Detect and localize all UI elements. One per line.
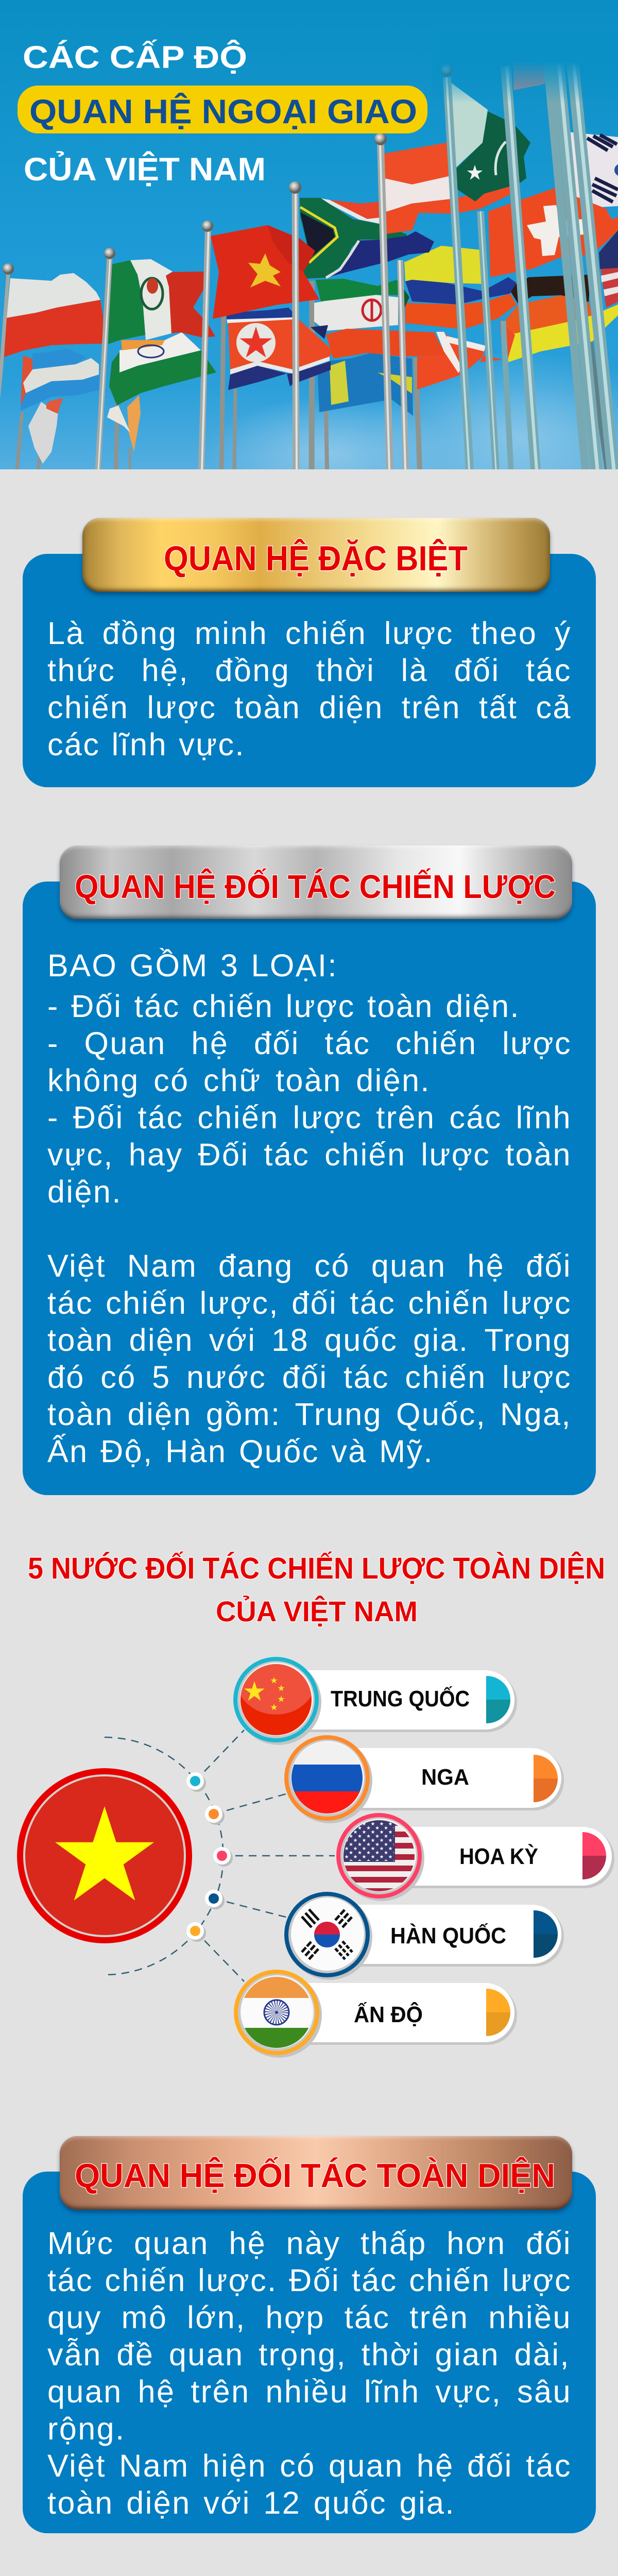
text block: toan dien description: hợp (265, 2300, 325, 2335)
text block: toan dien description: hiện (202, 2448, 267, 2483)
text block: chien luoc description: lược (293, 1100, 362, 1135)
text: bao gom 3 loai: LOẠI: (251, 948, 338, 983)
text block: toan dien description: đối (467, 2448, 513, 2483)
text block: toan dien description: gian (435, 2337, 500, 2372)
text block: chien luoc description: đối (291, 1285, 337, 1320)
text block: chien luoc description: Trung (295, 1397, 382, 1432)
pole tops (3, 64, 453, 275)
text block: toan dien description: hệ (138, 2374, 175, 2409)
text block: chien luoc description: toàn (47, 1397, 114, 1432)
text block: chien luoc description: chiến (408, 1285, 490, 1320)
text block: dac biet description: đối (454, 653, 500, 688)
back flag poles (17, 281, 608, 469)
title pill: QUAN HỆ NGOẠI GIAO (29, 92, 417, 130)
text block: dac biet description: đồng (102, 616, 177, 651)
panel: doi tac chien luoc (23, 882, 596, 1495)
text block: toan dien description: hơn (447, 2226, 506, 2261)
text block: dac biet description: thức (47, 653, 115, 688)
text block: toan dien description: hệ (229, 2226, 266, 2261)
text block: toan dien description: nhiều (265, 2374, 349, 2409)
row: nga (284, 1735, 564, 1823)
text block: chien luoc description: nước (186, 1360, 266, 1395)
text block: toan dien description: trọng, (259, 2337, 347, 2372)
sky background (0, 0, 618, 469)
text block: chien luoc description: lược, (200, 1285, 279, 1320)
flag: sweden (318, 353, 413, 416)
text block: chien luoc description: lược (502, 1026, 572, 1061)
front flag poles (0, 63, 614, 469)
text block: chien luoc description: Độ, (100, 1434, 153, 1469)
text block: chien luoc description: hệ (467, 1248, 505, 1283)
flag: south africa (300, 198, 434, 279)
text block: chien luoc description: chiến (405, 1360, 487, 1395)
text block: chien luoc description: vực, (47, 1137, 114, 1172)
text block: chien luoc description: Đối (71, 989, 122, 1024)
text block: toan dien description: sâu (517, 2374, 572, 2409)
text block: toan dien description: tác (352, 2263, 398, 2298)
row: an do (234, 1970, 517, 2058)
text block: chien luoc description: và (331, 1434, 367, 1469)
text block: chien luoc description: chiến (396, 1026, 477, 1061)
text block: chien luoc description: Việt (47, 1248, 106, 1283)
text: bao gom 3 loai: BAO (47, 948, 117, 983)
text block: toan dien description: quan (47, 2374, 123, 2409)
text block: toan dien description: chiến (409, 2263, 491, 2298)
text block: toan dien description: Mức (47, 2226, 114, 2261)
text block: chien luoc description: quan (371, 1248, 447, 1283)
top sky fade (433, 31, 618, 103)
flag: mexico (108, 259, 215, 344)
row: hoa ky (336, 1813, 614, 1901)
text block: chien luoc description: diện (128, 1397, 192, 1432)
text block: chien luoc description: Mỹ. (379, 1434, 434, 1469)
text block: chien luoc description: chiến (106, 1285, 187, 1320)
section title (28, 1552, 605, 1628)
text block: dac biet description: lĩnh (112, 727, 167, 762)
text block: chien luoc description: diện. (445, 989, 520, 1024)
heading: quan he dac biet: QUAN HỆ ĐẶC BIỆT (164, 538, 468, 578)
text block: toan dien description: với (203, 2485, 251, 2520)
text block: dac biet description: chiến (47, 690, 129, 725)
flag: south korea (568, 132, 618, 209)
heading: doi tac toan dien: QUAN HỆ ĐỐI TÁC TOÀN DIỆN (75, 2157, 555, 2194)
text block: chien luoc description: Trong (484, 1323, 572, 1358)
heading: doi tac chien luoc: QUAN HỆ ĐỐI TÁC CHIẾN LƯỢC (75, 868, 556, 905)
text block: toan dien description: 12 (263, 2485, 301, 2520)
banner: copper (60, 2136, 572, 2210)
panel: doi tac toan dien (23, 2172, 596, 2533)
text block: toan dien description: rộng. (47, 2411, 126, 2446)
text block: chien luoc description: Nam (127, 1248, 197, 1283)
text: bao gom 3 loai: 3 (220, 948, 239, 983)
flag: colombia style (404, 246, 517, 329)
row: trung quoc (233, 1657, 517, 1745)
text block: chien luoc description: Hàn (165, 1434, 227, 1469)
text block: toan dien description: trên (409, 2300, 469, 2335)
text block: chien luoc description: tác (264, 1137, 310, 1172)
text block: chien luoc description: - (47, 989, 59, 1024)
flag: iran (314, 279, 445, 359)
text block: chien luoc description: Quốc, (396, 1397, 486, 1432)
text block: toan dien description: quan (329, 2448, 404, 2483)
text block: toan dien description: có (280, 2448, 316, 2483)
text block: toan dien description: lớn, (187, 2300, 246, 2335)
text block: chien luoc description: gia. (413, 1323, 469, 1358)
text block: dac biet description: vực. (179, 727, 245, 762)
text block: toan dien description: trên (191, 2374, 250, 2409)
text block: toan dien description: tác (47, 2263, 93, 2298)
text block: dac biet description: minh (195, 616, 268, 651)
text block: toan dien description: tác (345, 2300, 390, 2335)
text: bao gom 3 loai: GỒM (130, 948, 209, 983)
text block: chien luoc description: đang (218, 1248, 294, 1283)
text block: dac biet description: trên (402, 690, 461, 725)
row: trung quoc: TRUNG QUỐC (331, 1685, 470, 1711)
text block: toan dien description: này (286, 2226, 341, 2261)
text block: chien luoc description: lược (286, 989, 355, 1024)
text block: chien luoc description: có (100, 1360, 136, 1395)
text block: dac biet description: các (47, 727, 100, 762)
text block: chien luoc description: chiến (192, 989, 273, 1024)
text block: dac biet description: theo (471, 616, 537, 651)
text block: chien luoc description: đối (282, 1360, 328, 1395)
text block: chien luoc description: hay (129, 1137, 183, 1172)
faded top flag (513, 57, 554, 90)
text block: toan dien description: hệ (417, 2448, 454, 2483)
text block: toan dien description: gia. (400, 2485, 455, 2520)
text block: chien luoc description: diện. (47, 1174, 122, 1209)
text block: chien luoc description: Đối (73, 1100, 124, 1135)
text block: toan dien description: quan (134, 2226, 209, 2261)
text block: dac biet description: thời (316, 653, 375, 688)
text block: toan dien description: Việt (47, 2448, 106, 2483)
flag: poland (4, 273, 103, 357)
text block: chien luoc description: không (47, 1063, 140, 1098)
text block: chien luoc description: chữ (203, 1063, 262, 1098)
text block: toan dien description: Đối (289, 2263, 340, 2298)
text block: toan dien description: mô (122, 2300, 167, 2335)
text block: chien luoc description: chiến (197, 1100, 279, 1135)
text block: chien luoc description: quốc (324, 1323, 398, 1358)
text block: toan dien description: tác (526, 2448, 572, 2483)
text block: chien luoc description: với (209, 1323, 256, 1358)
text block: chien luoc description: diện (129, 1323, 194, 1358)
flag: pakistan (451, 82, 530, 201)
text block: chien luoc description: tác (138, 1100, 183, 1135)
row: nga: NGA (421, 1765, 469, 1790)
text block: chien luoc description: hệ (191, 1026, 229, 1061)
row: an do: ẤN ĐỘ (354, 2001, 423, 2027)
text block: toan dien description: diện (126, 2485, 191, 2520)
flag: austria style (384, 142, 511, 234)
title line 1: CÁC CẤP ĐỘ (23, 40, 247, 75)
text block: toan dien description: dài, (514, 2337, 570, 2372)
text block: toan dien description: toàn (47, 2485, 114, 2520)
text block: dac biet description: tất (479, 690, 518, 725)
text block: chien luoc description: toàn (47, 1323, 114, 1358)
text block: toan dien description: Nam (119, 2448, 190, 2483)
text block: dac biet description: là (401, 653, 428, 688)
flag: vietnam (211, 225, 319, 319)
text block: toan dien description: quốc (314, 2485, 387, 2520)
text block: toan dien description: đối (526, 2226, 572, 2261)
text block: chien luoc description: Quốc (239, 1434, 319, 1469)
text block: chien luoc description: toàn (505, 1137, 572, 1172)
text block: chien luoc description: - (47, 1100, 59, 1135)
text block: dac biet description: toàn (234, 690, 301, 725)
text block: chien luoc description: diện. (356, 1063, 431, 1098)
text block: toan dien description: thấp (360, 2226, 427, 2261)
connector nodes (186, 1772, 233, 1942)
text block: chien luoc description: Ấn (47, 1434, 89, 1469)
dashed arc and connectors (105, 1730, 335, 1981)
flag: germany (505, 275, 618, 362)
text block: dac biet description: diện (319, 690, 384, 725)
text block: dac biet description: đồng (215, 653, 290, 688)
text block: toan dien description: quy (47, 2300, 102, 2335)
text block: chien luoc description: tác (344, 1360, 389, 1395)
text block: dac biet description: Là (47, 616, 85, 651)
text block: toan dien description: vực, (435, 2374, 502, 2409)
text block: chien luoc description: tác (350, 1285, 396, 1320)
banner: gold (82, 518, 550, 592)
text block: chien luoc description: 18 (271, 1323, 309, 1358)
header: flags over blue sky with title (0, 0, 618, 469)
flag: denmark style red and white (417, 321, 515, 389)
text block: chien luoc description: có (153, 1063, 190, 1098)
panel: quan he dac biet (23, 554, 596, 787)
text block: chien luoc description: lược (502, 1360, 572, 1395)
text block: dac biet description: tác (526, 653, 572, 688)
text block: chien luoc description: chiến (324, 1137, 406, 1172)
text: bao gom 3 loai (47, 948, 338, 983)
text block: dac biet description: hệ, (142, 653, 189, 688)
text block: chien luoc description: lược (502, 1285, 572, 1320)
text block: chien luoc description: đối (254, 1026, 300, 1061)
row: han quoc (284, 1892, 564, 1980)
text block: dac biet description: lược (147, 690, 216, 725)
title line 3: CỦA VIỆT NAM (24, 151, 266, 188)
text block: toan dien description: vẫn (47, 2337, 102, 2372)
diagram: 5 comprehensive strategic partners (17, 1551, 614, 2058)
text block: toan dien description: nhiều (488, 2300, 572, 2335)
section title: CỦA VIỆT NAM (216, 1595, 418, 1628)
text block: chien luoc description: Đối (198, 1137, 249, 1172)
text block: chien luoc description: có (315, 1248, 350, 1283)
text block: chien luoc description: đó (47, 1360, 85, 1395)
text block: dac biet description: chiến (285, 616, 367, 651)
text block: chien luoc description: Quan (84, 1026, 166, 1061)
text block: chien luoc description: trên (376, 1100, 435, 1135)
row: han quoc: HÀN QUỐC (390, 1922, 506, 1948)
text block: dac biet description: cả (536, 690, 572, 725)
text block: chien luoc description: đối (526, 1248, 572, 1283)
flag: north korea (227, 308, 333, 390)
text block: chien luoc description: tác (47, 1285, 93, 1320)
text block: chien luoc description: lĩnh (516, 1100, 572, 1135)
text block: chien luoc description (47, 989, 572, 1469)
text block: toan dien description: chiến (105, 2263, 186, 2298)
text block: toan dien description: lĩnh (364, 2374, 420, 2409)
text block: chien luoc description: toàn (276, 1063, 342, 1098)
flag: blue and white with red hoist (21, 349, 99, 464)
text block: toan dien description: lược (502, 2263, 572, 2298)
text block: chien luoc description: gồm: (206, 1397, 281, 1432)
text block: chien luoc description: tác (134, 989, 180, 1024)
text block: chien luoc description: lược (421, 1137, 490, 1172)
text block: toan dien description: lược. (198, 2263, 278, 2298)
text block: toan dien description: quan (169, 2337, 244, 2372)
vietnam circle (17, 1768, 192, 1943)
clouds (206, 350, 618, 526)
text block: chien luoc description: Nga, (500, 1397, 572, 1432)
flag: india (107, 332, 216, 452)
text block: toan dien description: thời (362, 2337, 420, 2372)
text block: chien luoc description: các (449, 1100, 502, 1135)
text block: chien luoc description: 5 (152, 1360, 171, 1395)
text block: chien luoc description: tác (325, 1026, 370, 1061)
text block: toan dien description: đề (116, 2337, 154, 2372)
flag: usa (599, 230, 618, 308)
text block: chien luoc description: - (47, 1026, 59, 1061)
text block: dac biet description: lược (384, 616, 454, 651)
text block: dac biet description (47, 616, 572, 762)
row: hoa ky: HOA KỲ (459, 1843, 538, 1869)
flag: switzerland (488, 188, 618, 277)
text block: toan dien description (47, 2226, 572, 2520)
text block: chien luoc description: toàn (367, 989, 434, 1024)
text block: dac biet description: ý (555, 616, 572, 651)
banner: silver (60, 845, 572, 919)
